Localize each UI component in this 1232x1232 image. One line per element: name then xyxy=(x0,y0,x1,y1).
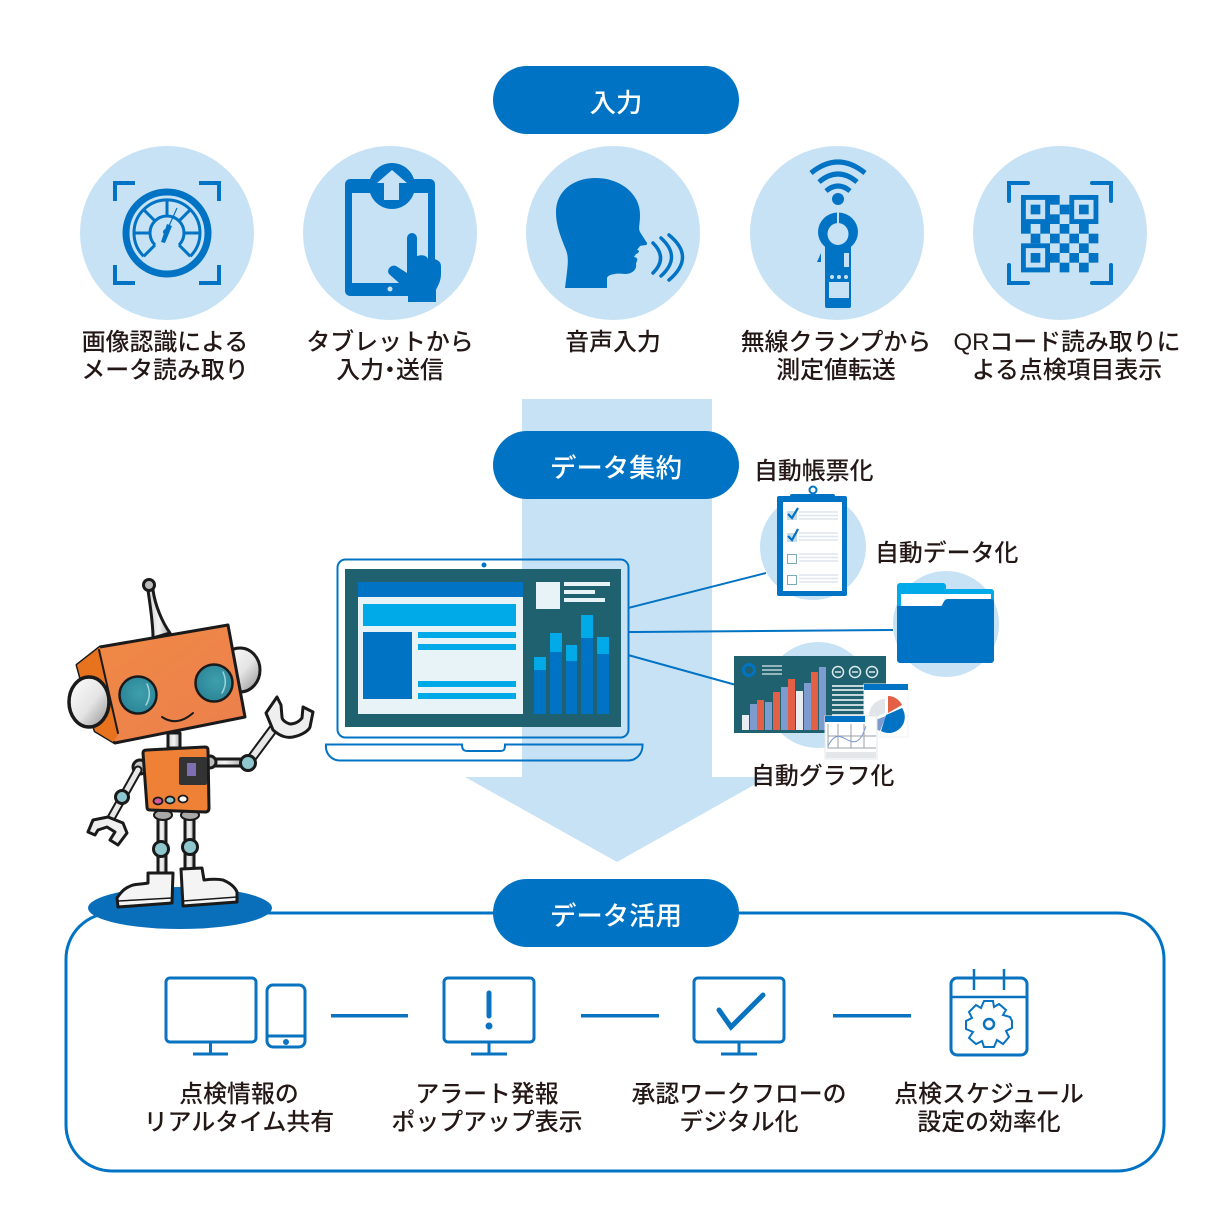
bottom labels xyxy=(144,1081,1084,1136)
right arm and wrench xyxy=(204,697,313,770)
panel: QR code xyxy=(954,146,1180,384)
label xyxy=(954,329,1180,384)
label: 画像認識による xyxy=(82,329,248,356)
label: 音声入力 xyxy=(565,329,661,356)
bottom labels: リアルタイム共有 xyxy=(144,1109,334,1136)
antenna xyxy=(144,580,170,638)
left ear xyxy=(69,677,109,727)
icon: gauge xyxy=(115,183,219,283)
icon: calendar with gear xyxy=(951,969,1027,1055)
panel: wireless clamp xyxy=(741,146,931,384)
label: 測定値転送 xyxy=(776,357,896,384)
label: auto reports: 自動帳票化 xyxy=(754,458,874,485)
panel: tablet input xyxy=(303,146,477,384)
label: メータ読み取り xyxy=(81,357,249,384)
panel: voice input xyxy=(526,146,700,356)
legs xyxy=(154,810,199,874)
panel: meter reading xyxy=(80,146,254,384)
heading: data aggregation xyxy=(493,431,739,499)
heading: input xyxy=(493,66,739,134)
bottom labels: 設定の効率化 xyxy=(917,1109,1061,1136)
label: 入力・送信 xyxy=(336,357,444,384)
panel: data use frame xyxy=(66,913,1164,1171)
bottom labels: 点検情報の xyxy=(179,1081,299,1108)
icon: alert monitor xyxy=(444,978,534,1054)
icon: clipboard report xyxy=(760,486,866,600)
heading: data aggregation: データ集約 xyxy=(550,453,682,483)
icon: wifi clamp meter xyxy=(811,162,865,308)
label xyxy=(306,328,474,384)
pie window xyxy=(864,684,908,737)
connector xyxy=(581,1014,659,1018)
label: auto data: 自動データ化 xyxy=(875,539,1018,567)
label: タブレットから xyxy=(306,328,474,356)
line chart window xyxy=(825,716,877,759)
connector lines xyxy=(628,573,893,685)
neck xyxy=(168,733,180,748)
icon: charts xyxy=(734,642,908,759)
screen window xyxy=(358,582,523,714)
robot mascot xyxy=(69,580,313,907)
icon: monitor and phone xyxy=(166,978,305,1054)
heading: input: 入力 xyxy=(590,88,642,118)
bottom labels: デジタル化 xyxy=(680,1108,799,1136)
screen summary xyxy=(536,582,610,609)
robot base ellipse xyxy=(88,887,272,929)
bottom labels: アラート発報 xyxy=(415,1081,559,1108)
bottom labels: ポップアップ表示 xyxy=(391,1109,583,1136)
connector xyxy=(331,1014,408,1018)
screen bar chart xyxy=(534,615,609,714)
heading: data use: データ活用 xyxy=(550,901,682,931)
icon: QR code xyxy=(1009,183,1111,283)
left arm and wrench xyxy=(88,760,147,845)
body xyxy=(143,747,209,812)
label: auto graphs: 自動グラフ化 xyxy=(751,763,894,790)
right ear xyxy=(220,648,260,692)
heading: data use xyxy=(493,879,739,947)
bottom labels: 点検スケジュール xyxy=(894,1081,1084,1108)
icon: check monitor xyxy=(694,978,784,1054)
icon: speaking head xyxy=(556,178,682,288)
label: よる点検項目表示 xyxy=(972,357,1162,384)
laptop xyxy=(326,560,643,760)
icon: folder xyxy=(893,571,999,677)
label xyxy=(81,329,249,384)
bars xyxy=(742,667,826,730)
boots xyxy=(117,868,237,907)
large down arrow xyxy=(465,399,768,862)
label: QRコード読み取りに xyxy=(954,329,1180,356)
head xyxy=(77,625,245,743)
bottom labels: 承認ワークフローの xyxy=(631,1081,847,1108)
icon: tablet with upload and hand xyxy=(345,163,441,302)
label xyxy=(741,329,931,384)
label: 無線クランプから xyxy=(741,329,931,356)
connector xyxy=(833,1014,911,1018)
